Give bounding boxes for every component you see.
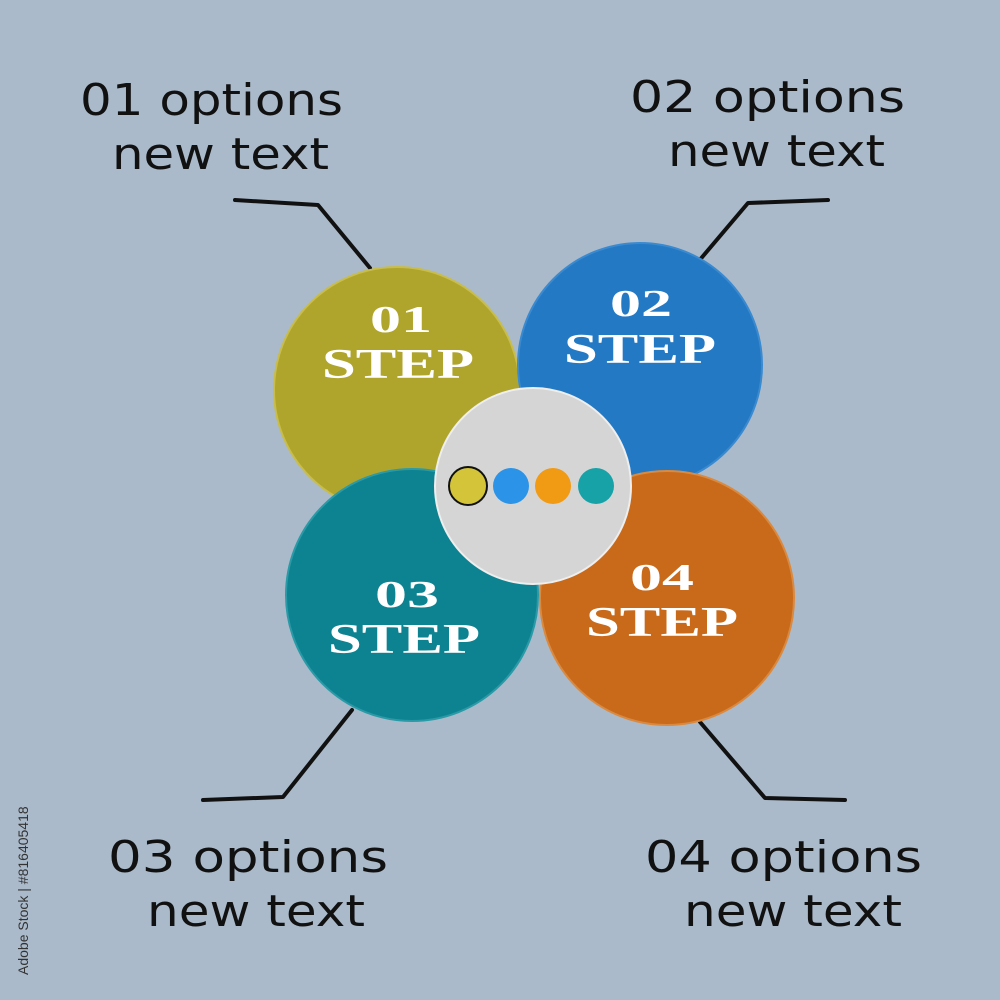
center circle with dots (435, 388, 631, 584)
circle: step 04: STEP (586, 600, 738, 646)
text: 03 options: 03 options (108, 832, 388, 883)
text: 04 options: new text (684, 886, 902, 937)
circle: step 01: STEP (322, 342, 474, 388)
text: 03 options (108, 832, 388, 937)
circle: step 01 (274, 267, 520, 513)
circle: step 02 (518, 243, 762, 487)
circle: step 02: STEP (564, 327, 716, 373)
circle: step 03 (286, 469, 538, 721)
text: 02 options: new text (668, 126, 885, 177)
circle: step 04: 04 (630, 557, 694, 599)
circle: step 02: 02 (610, 283, 672, 325)
text: 01 options (80, 75, 343, 180)
watermark id: Adobe Stock | #816405418 (15, 806, 31, 975)
connector lines (203, 200, 845, 800)
text: 02 options (630, 72, 905, 177)
text: 04 options: 04 options (645, 832, 922, 883)
circle: step 03: 03 (375, 574, 439, 616)
text: 01 options: new text (112, 129, 329, 180)
circle: step 04 (540, 471, 794, 725)
circle: step 03: STEP (328, 617, 480, 663)
text: 04 options (645, 832, 922, 937)
text: 02 options: 02 options (630, 72, 905, 123)
text: 03 options: new text (147, 886, 365, 937)
text: 01 options: 01 options (80, 75, 343, 126)
circle: step 01: 01 (370, 299, 432, 341)
